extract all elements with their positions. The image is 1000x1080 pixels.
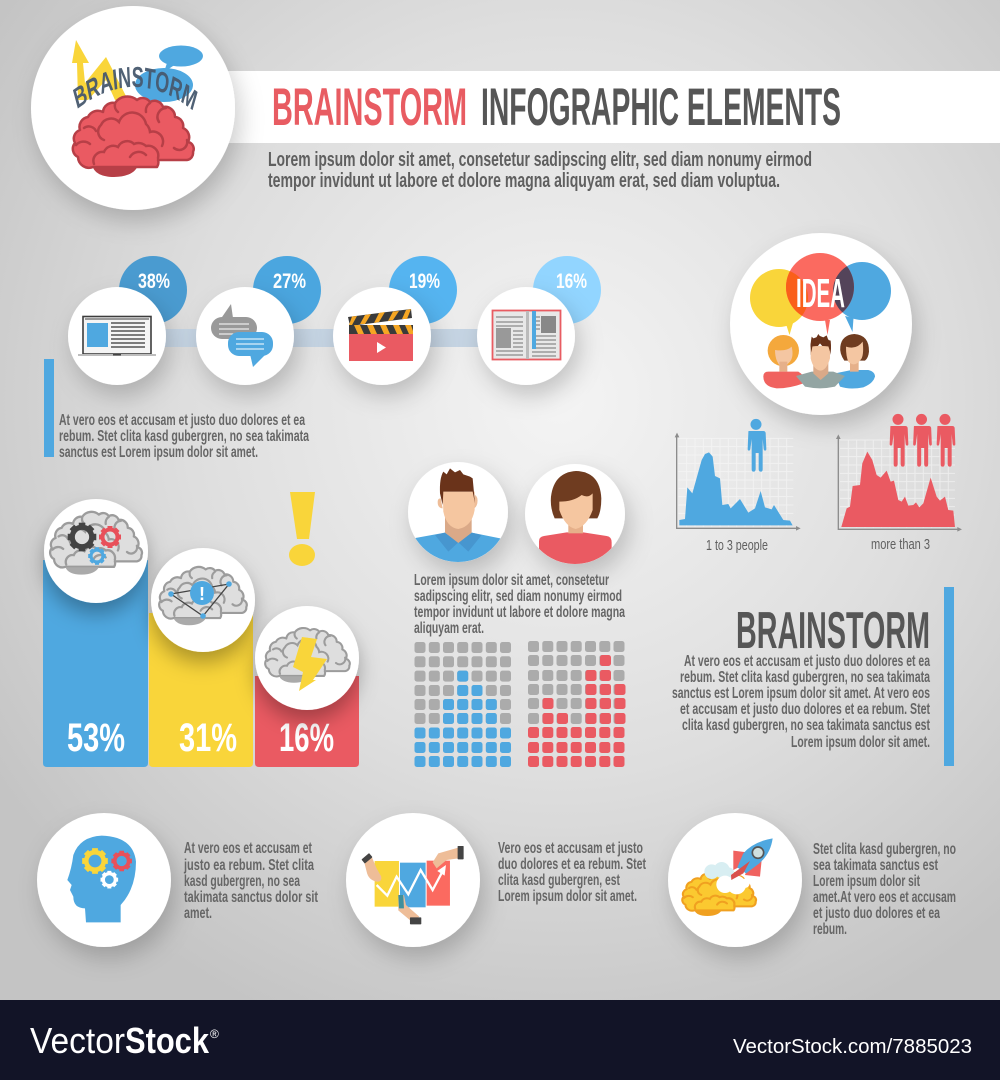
text block: rocket: [813, 841, 956, 938]
text block: right: [672, 653, 930, 751]
label: more than 3: more than 3: [871, 536, 930, 553]
icon: head with gears: [67, 836, 136, 922]
circle: chat: [196, 287, 294, 385]
subtitle text: tempor invidunt ut labore et dolore magna aliquyam erat, sed diam voluptua.: [268, 170, 780, 192]
icon: exclamation mark: [289, 492, 315, 566]
curved title: BRAINSTORM: [73, 66, 198, 110]
icon: chart with hands: [361, 846, 464, 924]
text block: timeline: sanctus est Lorem ipsum dolor sit amet.: [59, 444, 258, 461]
header banner: [225, 71, 1000, 143]
icon: grey brain: [265, 628, 350, 683]
label: 1 to 3 people: 1 to 3 people: [706, 537, 768, 554]
bar: yellow 31%: [149, 613, 253, 767]
icon: chat bubbles: [211, 304, 273, 367]
footer logo: Stock: [125, 1020, 210, 1061]
waffle chart: red: [528, 641, 626, 767]
circle: brain with network: [151, 548, 255, 652]
text block: hands: [498, 840, 646, 905]
icon: three red people: [890, 414, 955, 467]
bubble 27%: [253, 256, 321, 324]
icon: brain: [73, 96, 194, 177]
bar: red 16%: 16%: [279, 716, 334, 760]
icon: grey brain: [50, 512, 142, 575]
subtitle text: [268, 149, 812, 192]
circle: rocket: [668, 813, 802, 947]
bubble 16%: [533, 256, 601, 324]
circle: brain with gears: [44, 499, 148, 603]
text block: timeline: [59, 412, 309, 461]
icon: clapperboard: [348, 309, 413, 361]
icon: lightning: [293, 637, 327, 691]
text block: head: amet.: [184, 905, 212, 922]
footer bar: [0, 1000, 1000, 1080]
idea speech bubbles: [750, 253, 891, 335]
icon: open book: [492, 310, 560, 360]
text block: rocket: sea takimata sanctus est: [813, 857, 938, 874]
bubble 38%: 38%: [138, 270, 170, 293]
text block: head: [183, 840, 318, 922]
circle: hands and chart: [346, 813, 480, 947]
text block: hands: duo dolores et ea rebum. Stet: [498, 856, 646, 873]
idea circle: [730, 233, 912, 415]
axes: [677, 437, 797, 528]
footer logo: Vector: [30, 1020, 125, 1061]
icon: yellow brain: [682, 870, 756, 916]
axes: [838, 438, 958, 529]
text block: head: kasd gubergren, no sea: [184, 873, 300, 890]
footer logo: [30, 1020, 219, 1061]
bubble 19%: [389, 256, 457, 324]
text block: people: sadipscing elitr, sed diam nonumy eirmod: [414, 588, 622, 605]
bubble 27%: 27%: [273, 270, 306, 293]
text block: people: [414, 572, 625, 637]
logo circle: [27, 6, 250, 230]
circle: head: [37, 813, 171, 947]
chart: more than 3: [836, 434, 962, 532]
icon: clouds and rocket: [704, 838, 773, 894]
text block: timeline: At vero eos et accusam et justo duo dolores et ea: [59, 412, 305, 429]
text block: timeline: rebum. Stet clita kasd gubergren, no sea takimata: [59, 428, 309, 445]
blue side bar right: [944, 587, 954, 766]
icon: network: !: [199, 584, 205, 604]
avatar: man: [408, 462, 508, 568]
bubble 19%: 19%: [409, 270, 440, 293]
bubble 38%: [119, 256, 187, 324]
text block: hands: clita kasd gubergren, est: [498, 872, 620, 889]
footer url: VectorStock.com/7885023: [733, 1036, 972, 1058]
text block: rocket: rebum.: [813, 921, 847, 938]
icon: blue person: [748, 419, 766, 472]
text block: people: tempor invidunt ut labore et dolore magna: [414, 604, 625, 621]
bar: red 16%: [255, 676, 359, 767]
text block: right: Lorem ipsum dolor sit amet.: [791, 734, 930, 751]
text block: hands: Vero eos et accusam et justo: [498, 840, 643, 857]
text block: head: At vero eos et accusam et: [184, 840, 312, 857]
area: [679, 452, 793, 525]
icon: laptop: [78, 316, 156, 356]
three people: [763, 334, 875, 389]
text block: people: Lorem ipsum dolor sit amet, consetetur: [414, 572, 609, 589]
icon: gears: [68, 523, 121, 565]
avatar: woman: [525, 464, 625, 568]
bar: yellow 31%: 31%: [179, 716, 237, 760]
text block: rocket: Lorem ipsum dolor sit: [813, 873, 920, 890]
title: [272, 78, 841, 137]
waffle chart: blue: [414, 642, 511, 767]
footer logo: ®: [210, 1027, 219, 1041]
circle: book: [477, 287, 575, 385]
bar: blue 53%: [43, 560, 148, 767]
idea speech bubbles: IDEA: [796, 270, 845, 316]
blue side bar: [44, 359, 54, 457]
circle: clapperboard: [333, 287, 431, 385]
icon: speech bubbles: [135, 46, 203, 105]
bar: blue 53%: 53%: [67, 716, 125, 760]
timeline connector: [150, 329, 490, 347]
title: BRAINSTORM: [272, 78, 467, 137]
text block: head: justo ea rebum. Stet clita: [183, 857, 314, 874]
text block: hands: Lorem ipsum dolor sit amet.: [498, 888, 637, 905]
icon: grey brain: [159, 567, 247, 625]
area: [841, 452, 955, 527]
circle: brain with lightning: [255, 606, 359, 710]
text block: people: aliquyam erat.: [414, 620, 484, 637]
text block: head: takimata sanctus dolor sit: [184, 889, 318, 906]
grid: [840, 440, 955, 527]
circle: laptop: [68, 287, 166, 385]
icon: arrow: [72, 40, 128, 100]
grid: [678, 438, 793, 527]
chart: 1 to 3 people: [675, 433, 801, 531]
bubble 16%: 16%: [556, 270, 587, 293]
